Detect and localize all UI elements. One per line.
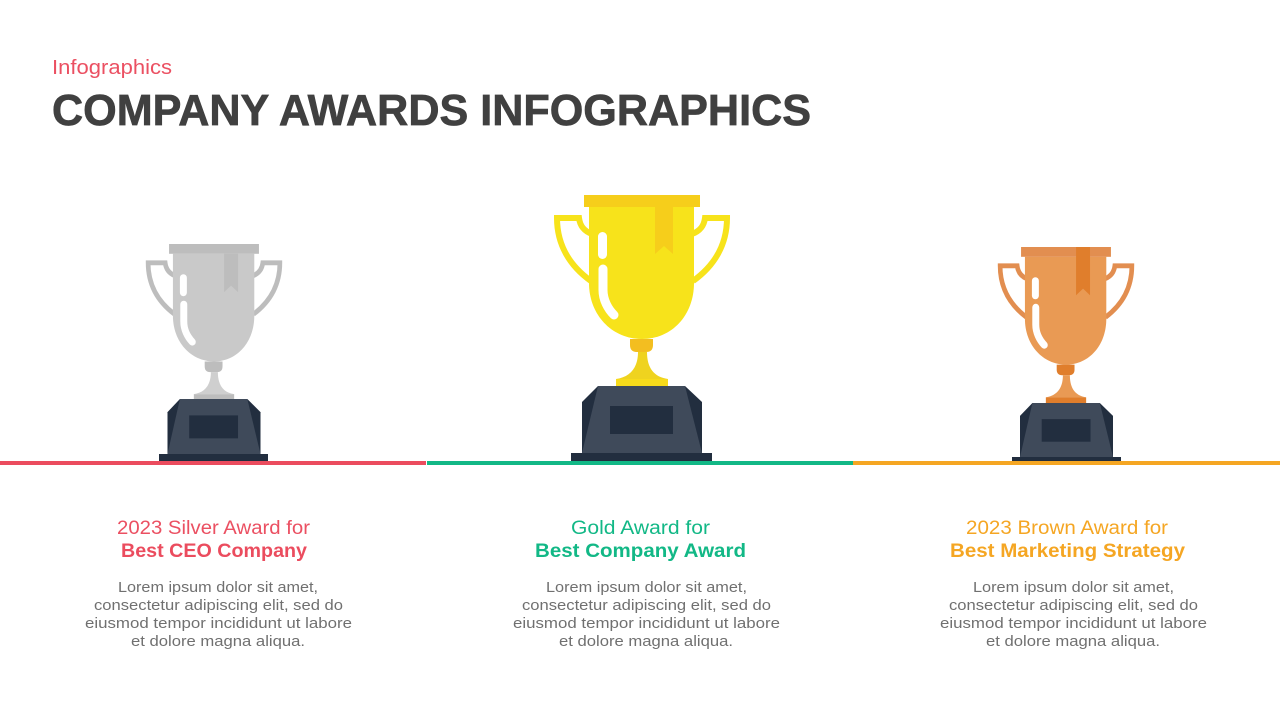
silver base — [168, 399, 260, 454]
timeline bar — [0, 461, 1280, 465]
text block: silver award: et dolore magna aliqua. — [131, 633, 305, 650]
text block: brown award: 2023 Brown Award for — [966, 518, 1169, 539]
text block: gold award: Lorem ipsum dolor sit amet, — [546, 579, 747, 596]
text block: brown award: Best Marketing Strategy — [950, 541, 1185, 562]
text block: silver award — [85, 518, 352, 650]
text block: brown award: consectetur adipiscing elit, sed do — [949, 597, 1198, 614]
bronze cup — [1000, 247, 1132, 403]
silver trophy — [148, 244, 280, 461]
bronze trophy — [1000, 247, 1132, 461]
silver cup — [148, 244, 280, 400]
gold cup — [557, 195, 727, 386]
eyebrow label: Infographics — [52, 57, 172, 79]
gold base — [582, 386, 702, 453]
text block: silver award: eiusmod tempor incididunt ut labore — [85, 615, 352, 632]
bronze base — [1020, 403, 1113, 457]
gold trophy — [557, 195, 727, 461]
text block: brown award: eiusmod tempor incididunt ut labore — [940, 615, 1207, 632]
text block: silver award: 2023 Silver Award for — [117, 518, 311, 539]
text block: silver award: Best CEO Company — [121, 541, 307, 562]
text block: gold award: eiusmod tempor incididunt ut labore — [513, 615, 780, 632]
title: COMPANY AWARDS INFOGRAPHICS — [52, 86, 811, 135]
text block: gold award: Gold Award for — [571, 518, 711, 539]
text block: gold award: Best Company Award — [535, 541, 746, 562]
text block: silver award: consectetur adipiscing elit, sed do — [94, 597, 343, 614]
text block: gold award: consectetur adipiscing elit, sed do — [522, 597, 771, 614]
text block: brown award — [940, 518, 1207, 650]
text block: brown award: Lorem ipsum dolor sit amet, — [973, 579, 1174, 596]
text block: brown award: et dolore magna aliqua. — [986, 633, 1160, 650]
text block: gold award — [513, 518, 780, 650]
text block: gold award: et dolore magna aliqua. — [559, 633, 733, 650]
text block: silver award: Lorem ipsum dolor sit amet, — [118, 579, 318, 596]
